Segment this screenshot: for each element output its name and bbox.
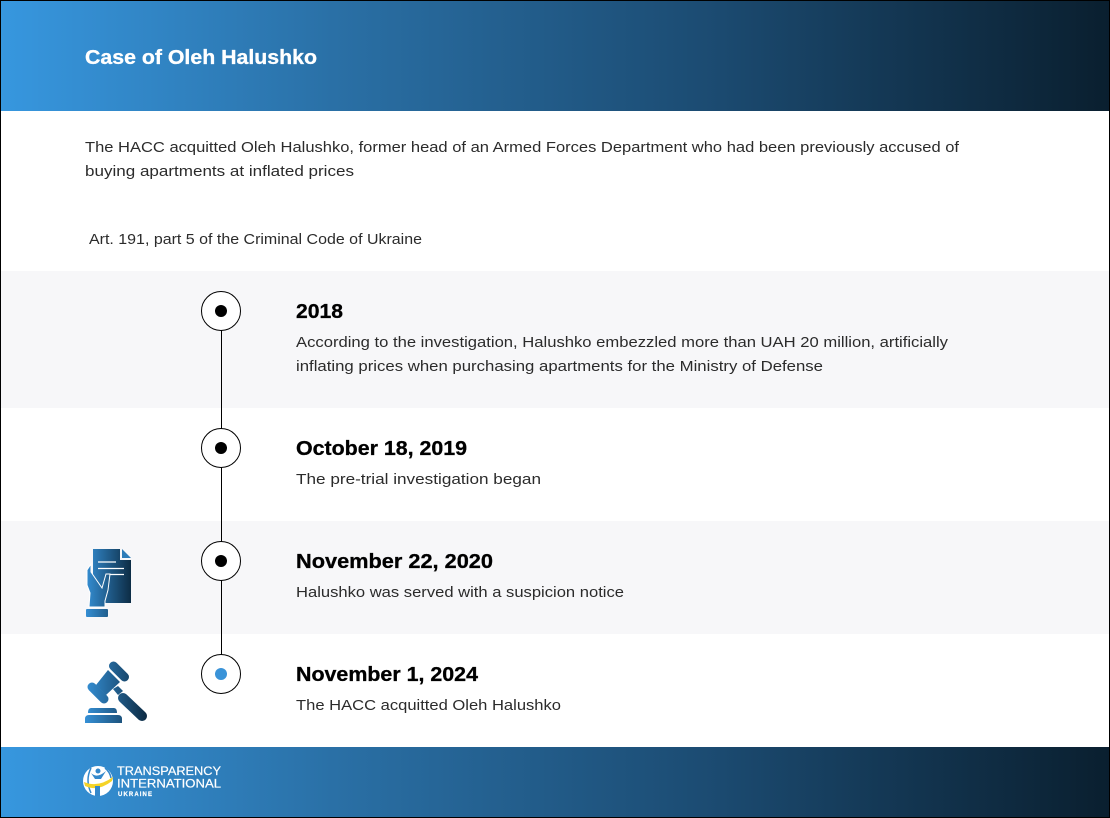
event: November 22, 2020: November 22, 2020 <box>296 551 493 573</box>
timeline marker: 2018 <box>202 292 240 330</box>
logo emblem <box>83 766 113 796</box>
intro text: buying apartments at inflated prices <box>85 163 354 180</box>
event: 2018: According to the investigation, Halushko embezzled more than UAH 20 million, artificially <box>296 334 949 351</box>
event: November 1, 2024 <box>296 664 561 714</box>
timeline marker: November 22, 2020 <box>202 542 240 580</box>
title: Case of Oleh Halushko <box>85 47 317 69</box>
event: October 18, 2019: October 18, 2019 <box>296 438 467 460</box>
icon: hand holding document <box>86 549 131 617</box>
row background: 2018 <box>1 271 1109 408</box>
event: November 1, 2024: November 1, 2024 <box>296 664 479 686</box>
logo wordmark <box>117 764 221 798</box>
event: November 22, 2020: Halushko was served with a suspicion notice <box>296 584 624 601</box>
row background: November 22, 2020 <box>1 521 1109 634</box>
event: 2018: 2018 <box>296 301 343 323</box>
logo wordmark: TRANSPARENCY <box>117 764 221 778</box>
icon: gavel <box>85 666 142 723</box>
intro text <box>85 139 960 180</box>
logo wordmark: INTERNATIONAL <box>117 776 221 790</box>
timeline marker: October 18, 2019 <box>202 428 240 468</box>
event: 2018 <box>296 301 949 375</box>
legal article reference: Art. 191, part 5 of the Criminal Code of Ukraine <box>89 231 422 248</box>
timeline marker: November 1, 2024 <box>202 654 240 694</box>
header banner <box>1 1 1109 111</box>
footer banner <box>1 747 1109 817</box>
event: October 18, 2019 <box>296 438 541 488</box>
logo wordmark: UKRAINE <box>118 792 152 798</box>
event: October 18, 2019: The pre-trial investigation began <box>296 471 541 488</box>
timeline line <box>220 311 222 674</box>
logo: Transparency International Ukraine <box>83 764 221 798</box>
event: 2018: inflating prices when purchasing apartments for the Ministry of Defense <box>296 358 823 375</box>
event: November 1, 2024: The HACC acquitted Oleh Halushko <box>296 697 561 714</box>
intro text: The HACC acquitted Oleh Halushko, former head of an Armed Forces Department who had been previously accused of <box>85 139 960 156</box>
event: November 22, 2020 <box>296 551 624 601</box>
